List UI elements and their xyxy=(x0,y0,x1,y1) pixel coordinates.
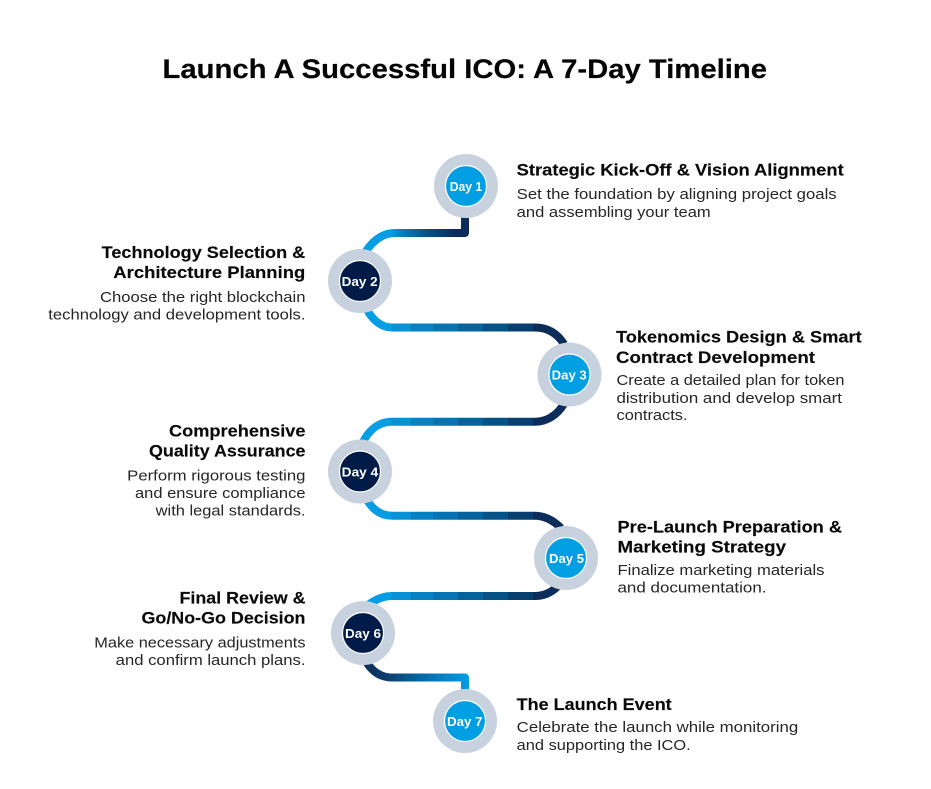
connector: day 2 to day 3 xyxy=(367,310,564,344)
text block: day 6: Final Review & xyxy=(180,590,306,608)
text block: day 4: Comprehensive xyxy=(169,422,306,440)
text block: day 7: and supporting the ICO. xyxy=(517,738,691,754)
text block: day 5: Marketing Strategy xyxy=(618,539,787,557)
text block: day 3: contracts. xyxy=(616,408,688,424)
node: day 4 xyxy=(328,440,392,504)
text block: day 1: Strategic Kick-Off & Vision Alignment xyxy=(517,162,844,180)
text block: day 5: and documentation. xyxy=(618,580,766,596)
node: day 1: Day 1 xyxy=(450,180,482,194)
text block: day 6: and confirm launch plans. xyxy=(116,653,306,669)
node: day 5: Day 5 xyxy=(549,552,584,566)
node: day 4: Day 4 xyxy=(342,466,378,480)
text block: day 1 xyxy=(517,162,844,221)
text block: day 4: with legal standards. xyxy=(155,504,306,520)
node: day 1 xyxy=(434,154,498,218)
text block: day 5 xyxy=(618,518,842,596)
node: day 3 xyxy=(538,342,602,406)
text block: day 3 xyxy=(616,328,862,424)
node: day 6 xyxy=(331,601,395,665)
text block: day 2: Choose the right blockchain xyxy=(100,290,306,306)
node: day 6: Day 6 xyxy=(345,627,381,641)
connector: day 3 to day 4 xyxy=(362,404,564,444)
text block: day 3: Tokenomics Design & Smart xyxy=(616,328,862,346)
text block: day 4: and ensure compliance xyxy=(135,486,306,502)
connector: day 4 to day 5 xyxy=(367,500,561,528)
text block: day 2: technology and development tools. xyxy=(48,308,306,324)
text block: day 2: Technology Selection & xyxy=(102,244,305,262)
title: Launch A Successful ICO: A 7-Day Timeline xyxy=(162,54,767,84)
node: day 3: Day 3 xyxy=(552,368,587,382)
node: day 7 xyxy=(433,689,497,753)
text block: day 7 xyxy=(517,696,798,754)
text block: day 6: Make necessary adjustments xyxy=(94,636,306,652)
text block: day 3: distribution and develop smart xyxy=(616,391,842,407)
node: day 5 xyxy=(534,526,598,590)
connector: day 6 to day 7 xyxy=(367,663,465,694)
text block: day 2 xyxy=(48,244,306,324)
text block: day 4: Perform rigorous testing xyxy=(127,468,306,484)
node: day 7: Day 7 xyxy=(447,715,483,729)
connector: day 5 to day 6 xyxy=(368,586,558,605)
text block: day 5: Finalize marketing materials xyxy=(618,563,824,579)
text block: day 3: Contract Development xyxy=(616,349,816,367)
text block: day 7: The Launch Event xyxy=(517,696,672,714)
text block: day 7: Celebrate the launch while monitoring xyxy=(517,720,798,736)
text block: day 3: Create a detailed plan for token xyxy=(616,373,844,389)
text block: day 5: Pre-Launch Preparation & xyxy=(618,518,842,536)
text block: day 2: Architecture Planning xyxy=(113,264,305,282)
connector: day 1 to day 2 xyxy=(363,214,465,256)
node: day 2 xyxy=(328,249,392,313)
text block: day 6 xyxy=(94,590,306,669)
text block: day 4: Quality Assurance xyxy=(149,442,306,460)
node: day 2: Day 2 xyxy=(342,275,378,289)
text block: day 6: Go/No-Go Decision xyxy=(142,610,306,628)
text block: day 1: Set the foundation by aligning project goals xyxy=(517,187,837,203)
text block: day 1: and assembling your team xyxy=(517,205,711,221)
text block: day 4 xyxy=(127,422,306,520)
